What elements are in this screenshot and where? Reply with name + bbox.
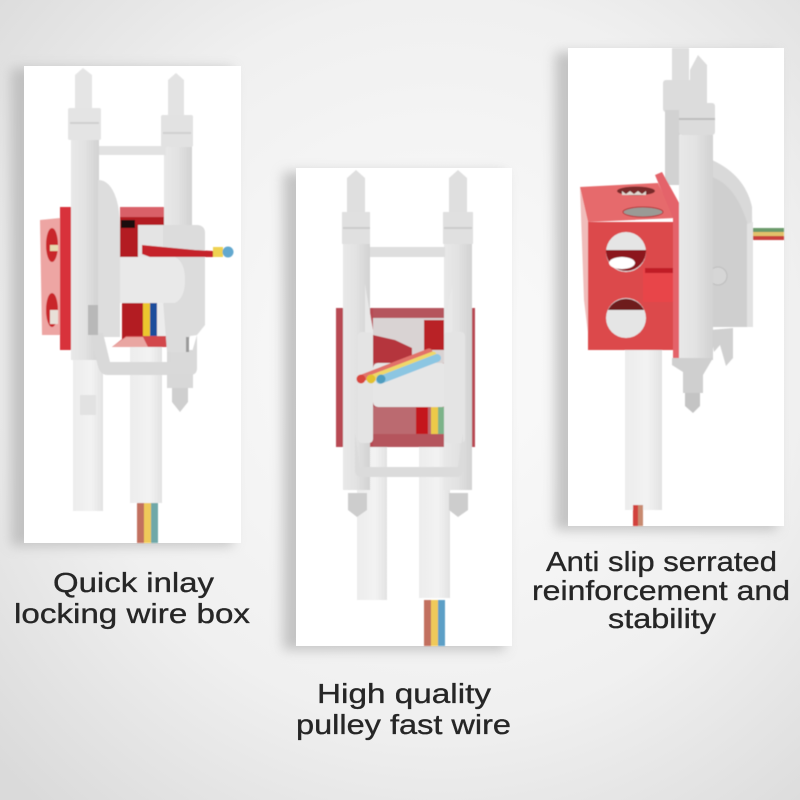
caption: high quality pulley: [296, 678, 511, 740]
caption: quick inlay: locking wire box: [14, 598, 250, 629]
caption: anti slip: Anti slip serrated: [546, 546, 777, 577]
product illustration: front-left view: [40, 68, 234, 543]
panel: anti slip serrated: [555, 48, 784, 530]
caption: anti slip: stability: [608, 603, 716, 634]
product illustration: side view: [580, 48, 784, 526]
product illustration: front view: [336, 170, 475, 646]
caption: quick inlay: [14, 567, 250, 629]
caption: anti slip: reinforcement and: [532, 575, 790, 606]
caption: high quality pulley: pulley fast wire: [296, 709, 511, 740]
panel: quick inlay wire box: [11, 66, 241, 546]
caption: anti slip: [532, 546, 790, 634]
panel: high quality pulley: [283, 168, 512, 650]
caption: quick inlay: Quick inlay: [53, 567, 214, 598]
caption: high quality pulley: High quality: [317, 678, 491, 709]
